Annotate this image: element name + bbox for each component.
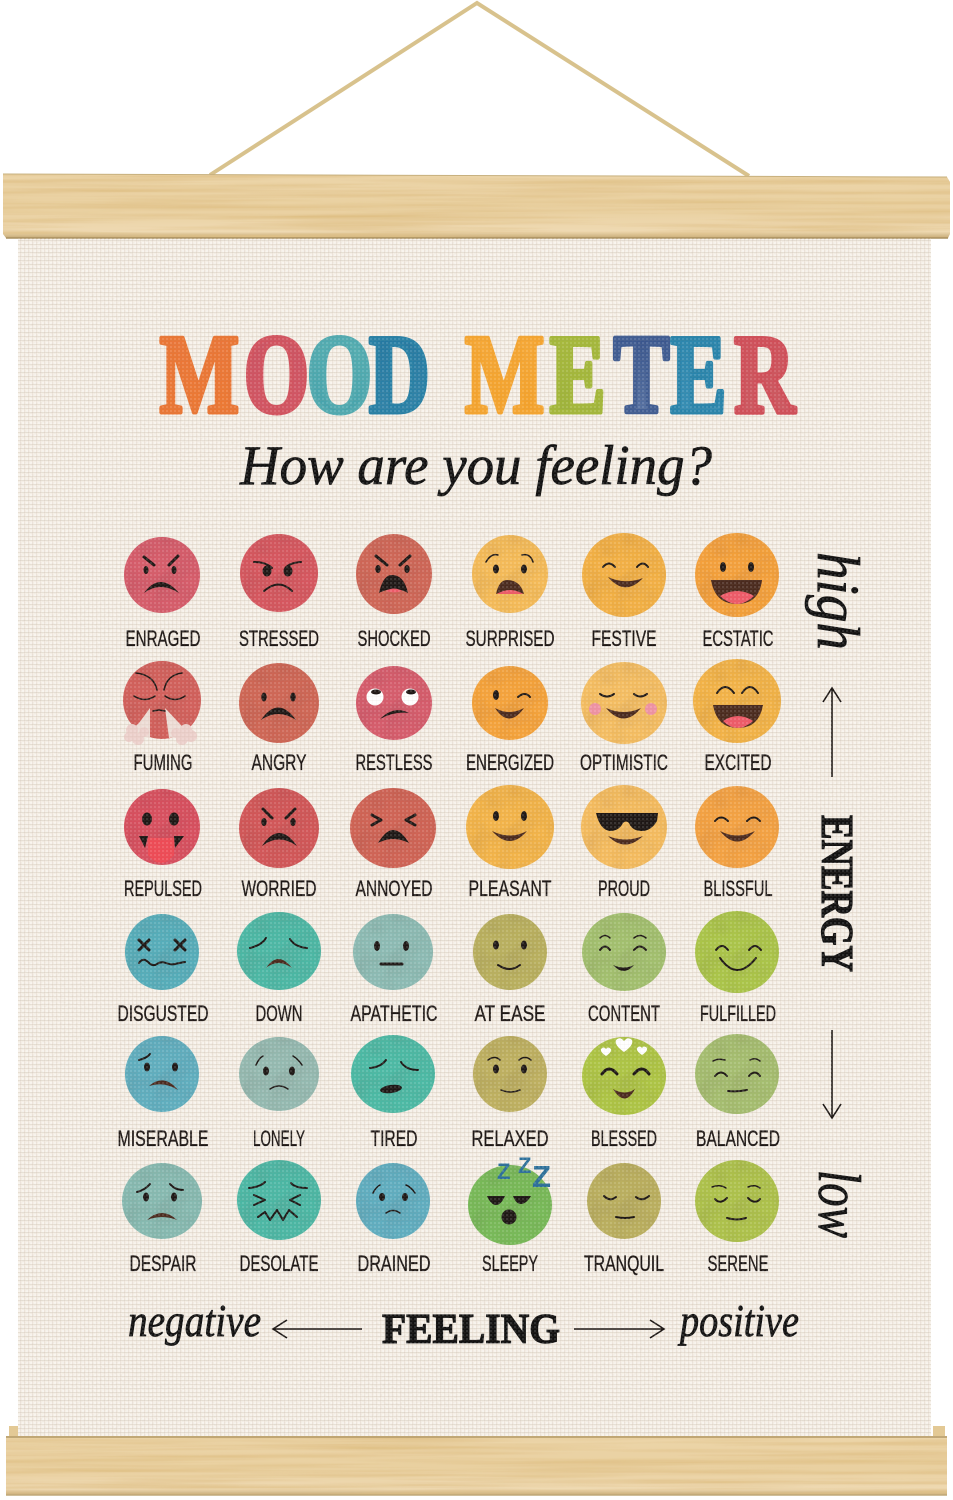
emoji: tired: TIRED (370, 1126, 418, 1151)
emoji: despair: DESPAIR (130, 1251, 196, 1276)
emoji: enraged: ENRAGED (126, 626, 200, 651)
axis label: negative: negative (128, 1295, 261, 1346)
emoji: drained: DRAINED (358, 1251, 430, 1276)
emoji: ecstatic (695, 533, 779, 651)
emoji: content: CONTENT (588, 1001, 660, 1026)
emoji: excited (693, 659, 781, 775)
emoji: desolate: DESOLATE (240, 1251, 318, 1276)
emoji: shocked (356, 534, 432, 651)
emoji: proud (581, 785, 667, 901)
subtitle: How are you feeling? (239, 435, 712, 497)
emoji: sleepy: Z (497, 1159, 510, 1184)
emoji: fuming (123, 661, 201, 775)
title: mood meter: D (369, 314, 430, 437)
axis heading: energy: ENERGY (812, 815, 862, 972)
emoji: miserable (118, 1036, 208, 1151)
emoji: surprised (466, 535, 554, 651)
emoji: serene: SERENE (708, 1251, 768, 1276)
emoji: at ease (473, 914, 547, 1026)
emoji: disgusted: DISGUSTED (118, 1001, 208, 1026)
emoji: angry (239, 663, 319, 775)
emoji: sleepy: Z (532, 1159, 551, 1194)
emoji: apathetic: APATHETIC (350, 1001, 438, 1026)
hanging cord (210, 3, 749, 176)
top wooden rail (3, 174, 950, 238)
emoji: stressed: STRESSED (239, 626, 319, 651)
bottom wooden rail (6, 1426, 947, 1495)
emoji: optimistic: OPTIMISTIC (580, 750, 668, 775)
arrow: feeling right (574, 1320, 664, 1338)
axis label: positive: positive (678, 1295, 799, 1346)
title: mood meter: O (307, 314, 372, 437)
emoji: annoyed: ANNOYED (356, 876, 432, 901)
emoji: optimistic (580, 662, 668, 775)
emoji: repulsed (124, 789, 202, 901)
emoji: festive (582, 533, 666, 651)
emoji: lonely: LONELY (253, 1126, 305, 1151)
emoji: balanced: BALANCED (696, 1126, 780, 1151)
emoji: desolate (237, 1160, 321, 1276)
emoji: tired (351, 1035, 435, 1151)
emoji: fuming: FUMING (134, 750, 192, 775)
emoji: blissful: BLISSFUL (704, 876, 772, 901)
emoji: tranquil (584, 1163, 664, 1276)
emoji: apathetic (350, 914, 438, 1026)
emoji: despair (122, 1163, 202, 1276)
axis heading: feeling: FEELING (382, 1307, 560, 1353)
emoji: serene (695, 1160, 779, 1276)
emoji: festive: FESTIVE (592, 626, 656, 651)
emoji: down (237, 912, 321, 1026)
emoji: worried: WORRIED (242, 876, 316, 901)
emoji: energized: ENERGIZED (466, 750, 554, 775)
emoji: pleasant: PLEASANT (468, 876, 552, 901)
title: mood meter: O (244, 314, 309, 437)
title: mood meter: R (734, 314, 796, 437)
title: mood meter: T (614, 314, 670, 437)
title: mood meter: M (465, 314, 544, 437)
emoji: angry: ANGRY (252, 750, 307, 775)
arrow: energy down (823, 1030, 841, 1118)
emoji: pleasant (466, 785, 554, 901)
axis label: low: low (806, 1170, 872, 1238)
emoji: energized (466, 666, 554, 775)
emoji: shocked: SHOCKED (358, 626, 430, 651)
emoji: surprised: SURPRISED (466, 626, 554, 651)
emoji: repulsed: REPULSED (124, 876, 202, 901)
emoji: excited: EXCITED (704, 750, 772, 775)
emoji: ecstatic: ECSTATIC (702, 626, 774, 651)
emoji: blessed: BLESSED (591, 1126, 657, 1151)
axis label: high: high (805, 552, 871, 650)
emoji: balanced (695, 1034, 780, 1151)
title: mood meter: E (550, 314, 606, 437)
emoji: blessed (582, 1037, 666, 1151)
emoji: proud: PROUD (598, 876, 650, 901)
emoji: blissful (695, 786, 779, 901)
emoji: disgusted (118, 914, 208, 1026)
emoji: sleepy: SLEEPY (482, 1251, 538, 1276)
emoji: sleepy (468, 1153, 552, 1276)
emoji: restless (356, 666, 432, 775)
emoji: enraged (124, 537, 200, 651)
emoji: drained (356, 1163, 430, 1276)
emoji: annoyed (350, 788, 436, 901)
emoji: content (582, 913, 666, 1026)
emoji: stressed (239, 534, 319, 651)
emoji: relaxed (472, 1036, 548, 1151)
emoji: at ease: AT EASE (474, 1001, 546, 1026)
title: mood meter: E (671, 314, 727, 437)
emoji: lonely (239, 1037, 319, 1151)
emoji: restless: RESTLESS (356, 750, 432, 775)
emoji: sleepy: Z (518, 1153, 531, 1178)
title: mood meter: M (160, 314, 239, 437)
emoji: relaxed: RELAXED (472, 1126, 548, 1151)
emoji: miserable: MISERABLE (118, 1126, 208, 1151)
panel: linen canvas (18, 232, 931, 1438)
emoji: worried (239, 788, 319, 901)
emoji: tranquil: TRANQUIL (584, 1251, 664, 1276)
emoji: fulfilled (695, 911, 779, 1026)
emoji: fulfilled: FULFILLED (700, 1001, 776, 1026)
arrow: energy up (823, 688, 841, 777)
arrow: feeling left (273, 1320, 362, 1338)
emoji: down: DOWN (256, 1001, 302, 1026)
